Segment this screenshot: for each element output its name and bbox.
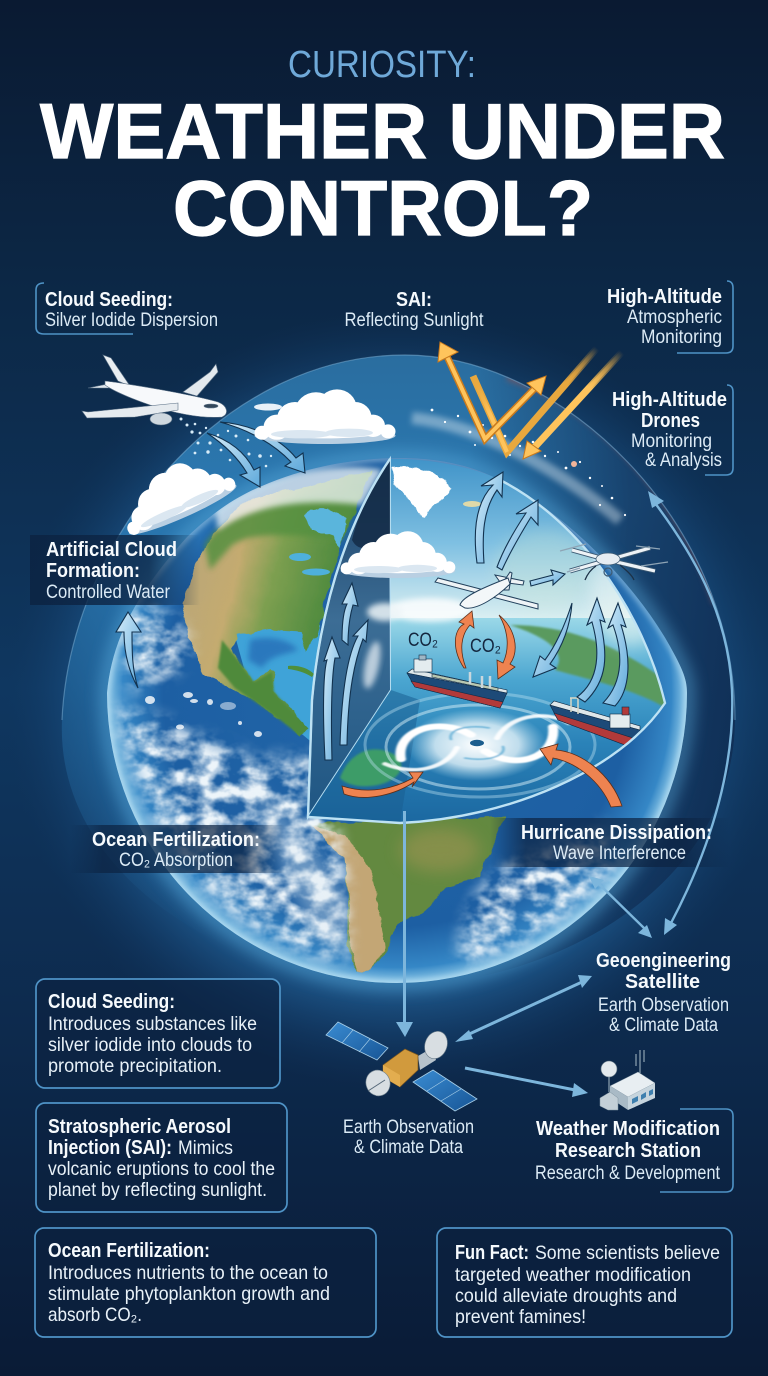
green northern belt <box>202 500 358 571</box>
label background: ocean fertilization <box>70 825 285 873</box>
clouds outside the planet <box>111 389 396 541</box>
sunlight reflected: yellow arrows <box>438 342 622 459</box>
label: satellite caption <box>343 1117 474 1158</box>
panel: ocean fertilization explanation: stimulate phytoplankton growth and <box>48 1283 330 1305</box>
mexico green <box>218 640 306 734</box>
label: SAI reflecting sunlight: SAI: <box>396 288 432 311</box>
CO2 labels <box>408 630 501 657</box>
panel: stratospheric aerosol injection: volcanic eruptions to cool the <box>48 1158 275 1180</box>
panel: cloud seeding explanation: promote precipitation. <box>48 1055 222 1077</box>
label: geoengineering satellite: Satellite <box>625 970 700 993</box>
globe: atmosphere halo <box>46 338 749 1062</box>
arrow: satellite to research station <box>465 1068 588 1097</box>
panel: fun fact: could alleviate droughts and <box>455 1285 677 1307</box>
label: weather modification research station <box>535 1109 733 1192</box>
rim of cutaway <box>308 459 665 823</box>
panel: ocean fertilization explanation: Ocean Fertilization: <box>48 1239 210 1262</box>
CO2 labels: CO₂ <box>408 630 438 651</box>
title: CONTROL? <box>173 164 593 252</box>
panel: cloud seeding explanation: silver iodide into clouds to <box>48 1034 252 1056</box>
panel: stratospheric aerosol injection: planet by reflecting sunlight. <box>48 1179 267 1201</box>
label: satellite caption: Earth Observation <box>343 1117 474 1138</box>
label: geoengineering satellite: Geoengineering <box>596 949 731 972</box>
hurricane eye <box>470 740 484 746</box>
northern ice and cloud cover <box>215 467 382 530</box>
wispy cloud bands <box>115 607 620 965</box>
icon: research station <box>600 1050 655 1110</box>
cutaway: interior scene <box>309 459 664 822</box>
label: hurricane dissipation <box>521 821 712 864</box>
icon: drone <box>560 544 668 580</box>
north america <box>182 470 372 737</box>
globe: Earth with continents and clouds <box>107 458 687 983</box>
label: high-altitude atmospheric monitoring <box>607 281 733 353</box>
label: weather modification research station: Research Station <box>555 1139 701 1162</box>
panel: cloud seeding explanation <box>36 979 280 1088</box>
panel: fun fact: Some scientists believe <box>535 1242 720 1264</box>
label: high-altitude atmospheric monitoring: Monitoring <box>641 327 722 348</box>
wedge vapour <box>360 640 384 690</box>
south america <box>310 817 507 972</box>
label: high-altitude drones <box>612 385 733 475</box>
CO2 labels: CO₂ <box>470 636 501 657</box>
title: CURIOSITY: <box>288 44 476 86</box>
curved double arrow: satellite label to drones <box>648 491 732 935</box>
title <box>40 44 725 252</box>
label: artificial cloud formation: Controlled Water <box>46 582 171 603</box>
particles: stratospheric aerosol band <box>412 409 626 520</box>
label: weather modification research station: Weather Modification <box>536 1117 720 1140</box>
gulf shallow water <box>232 625 320 745</box>
panel: fun fact <box>437 1228 732 1337</box>
label background: hurricane dissipation <box>490 818 730 867</box>
label: high-altitude atmospheric monitoring: Atmospheric <box>627 307 722 328</box>
panel: ocean fertilization explanation: absorb CO₂. <box>48 1304 142 1326</box>
label: SAI reflecting sunlight <box>344 288 484 331</box>
panel: stratospheric aerosol injection: Mimics <box>178 1137 233 1159</box>
panel: fun fact: targeted weather modification <box>455 1264 691 1286</box>
cuba <box>288 666 314 677</box>
label: high-altitude drones: Drones <box>641 409 700 432</box>
distant land <box>510 625 672 712</box>
green phytoplankton bloom <box>340 749 401 786</box>
cargo ship left <box>407 655 507 708</box>
label: weather modification research station: Research & Development <box>535 1163 721 1184</box>
label: artificial cloud formation: Artificial Cloud <box>46 538 177 561</box>
label: SAI reflecting sunlight: Reflecting Sunlight <box>344 310 484 331</box>
panel: stratospheric aerosol injection <box>36 1103 287 1212</box>
panel: cloud seeding explanation: Introduces substances like <box>48 1013 257 1035</box>
label: artificial cloud formation <box>46 538 177 603</box>
icon: large airliner <box>82 355 227 425</box>
pacific small clouds <box>145 692 262 737</box>
label: cloud seeding silver iodide: Cloud Seeding: <box>45 288 173 311</box>
panel: fun fact: Fun Fact: <box>455 1241 529 1264</box>
cutaway: wedge wall <box>308 459 391 817</box>
panel: ocean fertilization explanation: Introduces nutrients to the ocean to <box>48 1262 328 1284</box>
label: high-altitude drones: Monitoring <box>631 431 712 452</box>
label: geoengineering satellite: Earth Observation <box>598 995 729 1016</box>
label: cloud seeding silver iodide <box>36 283 218 334</box>
clouds across the cutaway <box>341 531 455 621</box>
panel: stratospheric aerosol injection: Stratospheric Aerosol <box>48 1115 231 1138</box>
label: hurricane dissipation: Wave Interference <box>553 843 686 864</box>
cloud seeding spray particles <box>180 418 272 467</box>
panel: stratospheric aerosol injection: Injection (SAI): <box>48 1136 172 1159</box>
label: geoengineering satellite: & Climate Data <box>609 1015 718 1036</box>
panel: cloud seeding explanation: Cloud Seeding: <box>48 990 175 1013</box>
panel: fun fact: prevent famines! <box>455 1306 586 1328</box>
long arrow: earth to satellite <box>396 811 413 1037</box>
label: high-altitude atmospheric monitoring: High-Altitude <box>607 285 722 308</box>
cargo ship right <box>550 698 640 748</box>
label background: artificial cloud formation <box>30 535 200 605</box>
blue circulation arrows <box>116 422 628 760</box>
label: satellite caption: & Climate Data <box>354 1137 463 1158</box>
double arrow: hurricane to satellite label <box>589 876 652 938</box>
panel: ocean fertilization explanation <box>35 1228 376 1337</box>
double arrow: satellite to geoengineering <box>455 975 592 1042</box>
label: ocean fertilization: CO₂ Absorption <box>119 850 233 871</box>
greenland <box>392 465 452 518</box>
hurricane <box>365 693 595 797</box>
label: ocean fertilization: Ocean Fertilization: <box>92 828 260 851</box>
hudson bay and great lakes <box>289 509 346 576</box>
label: cloud seeding silver iodide: Silver Iodide Dispersion <box>45 310 218 331</box>
label: hurricane dissipation: Hurricane Dissipation: <box>521 821 712 844</box>
label: ocean fertilization <box>92 828 260 871</box>
label: geoengineering satellite <box>596 949 731 1036</box>
orange current arrows <box>342 611 622 807</box>
label: high-altitude drones: & Analysis <box>645 450 722 471</box>
wall shadow over floor <box>308 690 420 823</box>
icon: satellite <box>326 1022 477 1111</box>
label: high-altitude drones: High-Altitude <box>612 388 727 411</box>
title: WEATHER UNDER <box>40 87 725 175</box>
icon: small plane in cutaway <box>435 572 538 609</box>
label: artificial cloud formation: Formation: <box>46 559 140 582</box>
